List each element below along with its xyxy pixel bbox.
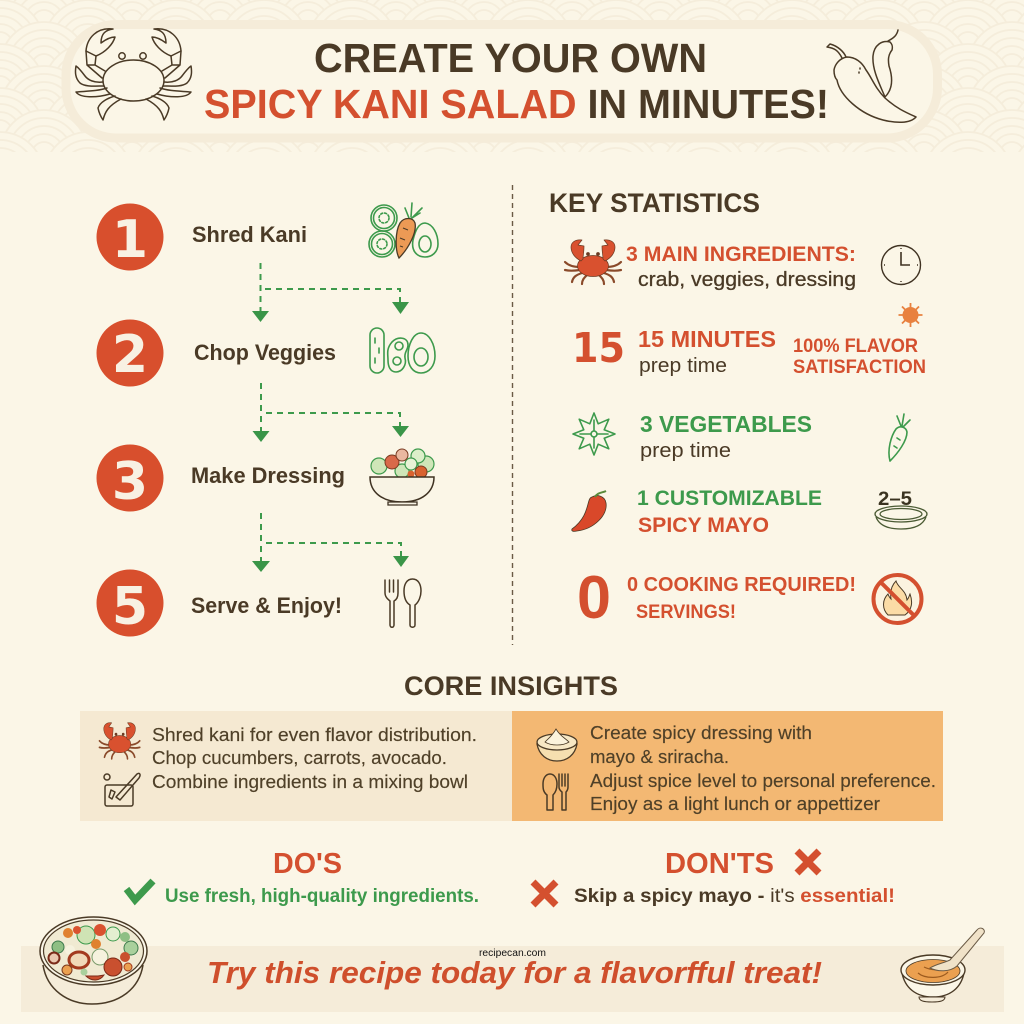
step label: Shred Kani	[192, 222, 307, 247]
number badge 1	[96, 204, 164, 270]
heading: DO'S	[273, 848, 342, 880]
banner pill	[66, 24, 938, 138]
panel: don'ts	[533, 848, 895, 907]
stat text: 3 MAIN INGREDIENTS:	[626, 242, 856, 266]
line: Enjoy as a light lunch or appettizer	[590, 793, 880, 814]
icon: chili	[572, 491, 606, 531]
icon: clock	[882, 246, 920, 284]
icon: red crab	[565, 240, 621, 284]
panel: do's	[126, 848, 479, 907]
number badge 5	[96, 570, 164, 637]
arrows: step 2 to 3	[252, 383, 409, 442]
step 3	[96, 444, 434, 512]
panel: key statistics	[549, 188, 927, 631]
icon: dressing bowl with spoon	[901, 928, 984, 1002]
flavor line 1: 100% FLAVOR	[793, 336, 918, 357]
icon: spoon and fork	[543, 774, 568, 810]
line: Combine ingredients in a mixing bowl	[152, 771, 468, 792]
stat text line 2: SPICY MAYO	[638, 514, 769, 537]
line: Chop cucumbers, carrots, avocado.	[152, 747, 447, 768]
icon: red crab	[99, 723, 140, 759]
heading: KEY STATISTICS	[549, 188, 760, 218]
stat text line 1: 1 CUSTOMIZABLE	[637, 487, 822, 510]
step label: Make Dressing	[191, 463, 345, 488]
flavor line 2: SATISFACTION	[793, 357, 926, 378]
step label: Serve & Enjoy!	[191, 593, 342, 618]
flavor stat	[793, 336, 926, 378]
icon: crab outline	[75, 29, 192, 120]
icon: check mark	[126, 881, 153, 900]
step 5	[96, 570, 421, 637]
title	[204, 35, 829, 127]
icon: chopped vegetables	[370, 328, 435, 373]
insights text	[590, 722, 936, 814]
stat detail: SERVINGS!	[636, 602, 736, 623]
watermark: recipecan.com	[479, 948, 546, 959]
call to action: Try this recipe today for a flavorfful treat!	[207, 955, 822, 990]
number badge 1: 1	[112, 210, 148, 270]
patterned header band	[0, 0, 1024, 152]
icon: no fire	[874, 575, 922, 623]
icon: fork and spoon	[385, 579, 421, 627]
stat detail: crab, veggies, dressing	[638, 268, 856, 291]
stat text: 0 COOKING REQUIRED!	[627, 573, 856, 596]
arrows: step 3 to 5	[252, 513, 409, 572]
line: Adjust spice level to personal preference.	[590, 770, 936, 791]
servings number: 2–5	[878, 489, 912, 510]
heading: CORE INSIGHTS	[404, 671, 618, 701]
line: Create spicy dressing with	[590, 722, 812, 743]
icon: chili outline	[827, 30, 916, 122]
number badge 5: 5	[112, 577, 148, 637]
icon: green flower	[573, 413, 615, 455]
step label: Chop Veggies	[194, 340, 336, 365]
stat text: 3 VEGETABLES	[640, 411, 812, 437]
big number: 0	[577, 564, 611, 631]
line: Shred kani for even flavor distribution.	[152, 724, 477, 745]
insights text	[152, 724, 477, 792]
card background	[80, 711, 512, 821]
don't text: Skip a spicy mayo - it's essential!	[574, 885, 895, 907]
stat detail: prep time	[640, 440, 731, 462]
heading: DON'TS	[665, 848, 774, 880]
title line 2: SPICY KANI SALAD IN MINUTES!	[204, 81, 829, 127]
icon: salad bowl	[370, 449, 434, 505]
panel: core insights	[80, 671, 943, 821]
stat: minutes	[572, 303, 926, 378]
icon: mixing board	[104, 773, 140, 806]
stat: customizable mayo	[572, 487, 927, 537]
panel: steps	[96, 203, 438, 637]
icon: cross	[533, 882, 556, 905]
stat: vegetables	[573, 411, 910, 462]
insights left card	[80, 711, 512, 821]
stat: main ingredients	[565, 240, 920, 291]
icon: cucumber, carrot, avocado	[369, 203, 438, 258]
number badge 3	[96, 444, 164, 512]
do text: Use fresh, high-quality ingredients.	[165, 885, 479, 907]
title line 1: CREATE YOUR OWN	[314, 35, 707, 81]
stat: no cooking	[577, 564, 922, 631]
icon: sun	[898, 303, 922, 327]
number badge 3: 3	[112, 452, 148, 512]
footer	[21, 917, 1004, 1012]
icon: plate	[875, 506, 927, 529]
card background	[512, 711, 943, 821]
number badge 2: 2	[112, 325, 148, 385]
step 2	[96, 320, 435, 386]
big number: 15	[572, 324, 625, 372]
icon: dressing bowl	[537, 729, 577, 761]
icon: heading cross	[797, 851, 819, 873]
line: mayo & sriracha.	[590, 746, 729, 767]
insights right card	[512, 711, 943, 821]
stat text: 15 MINUTES	[638, 326, 776, 352]
number badge 2	[96, 320, 164, 386]
arrows: step 1 to 2	[252, 263, 409, 322]
header banner	[66, 24, 938, 138]
footer band	[21, 946, 1004, 1012]
stat detail: prep time	[639, 355, 727, 377]
step 1	[96, 203, 438, 270]
divider	[512, 185, 514, 645]
icon: salad bowl	[40, 917, 147, 1004]
icon: carrot outline	[889, 414, 910, 461]
